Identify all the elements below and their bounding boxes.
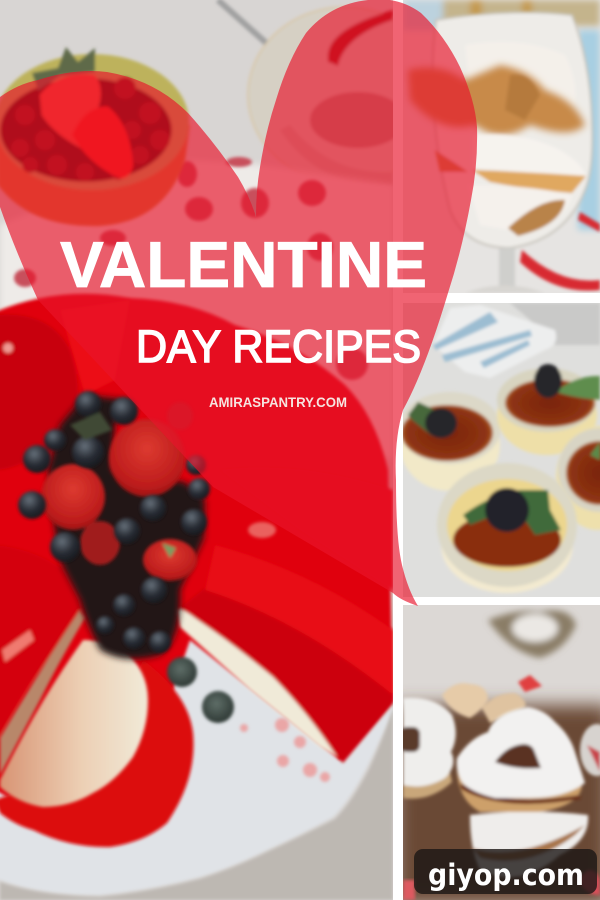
- white patterned cloth: [0, 164, 387, 310]
- golden crumbs: [408, 65, 585, 135]
- sugar background: [403, 605, 600, 900]
- left cookie: [400, 698, 456, 799]
- caramel band: [472, 170, 586, 193]
- grey table corner: [0, 708, 393, 900]
- white plate: [0, 640, 393, 895]
- watermark badge: [414, 849, 597, 894]
- title: VALENTINE: VALENTINE: [60, 228, 427, 301]
- strawberry cloth prints: [14, 157, 368, 380]
- heart overlay: [0, 0, 477, 606]
- white panna cotta half moon: [0, 640, 148, 807]
- panel: main jelly photo: [0, 0, 393, 900]
- watermark badge: giyop.com: [428, 858, 584, 892]
- sandwich layer: [457, 770, 582, 812]
- glass stem: [499, 248, 515, 293]
- panel: creme brulee photo: [399, 303, 600, 597]
- top cookie: [457, 707, 585, 798]
- tablecloth background: [0, 0, 393, 900]
- ramekin far right: [556, 426, 600, 530]
- striped cloth: [433, 303, 600, 378]
- subtitle: DAY RECIPES: DAY RECIPES: [136, 321, 421, 372]
- heart cookie stack: [457, 707, 588, 877]
- dark berry mass: [48, 395, 205, 659]
- glass dish: [246, 5, 393, 183]
- small biscuits: [442, 675, 542, 723]
- berries cluster: [18, 391, 234, 723]
- right glass item: [580, 724, 600, 776]
- blueberries: [18, 391, 234, 723]
- ramekin front: [437, 463, 577, 593]
- website credit: AMIRASPANTRY.COM: [209, 394, 347, 410]
- jelly base layer: [0, 294, 393, 824]
- silver spoon handle: [216, 0, 268, 46]
- cream top: [465, 42, 576, 110]
- cream lower: [519, 185, 554, 193]
- strawberries: [41, 402, 197, 581]
- brown table: [395, 705, 600, 900]
- panel: linzer cookies photo: [395, 605, 600, 900]
- red corner pieces: [403, 880, 415, 900]
- bowl of raspberries: [0, 47, 190, 226]
- heart stencil in sugar: [488, 611, 576, 658]
- parfait background: [403, 0, 600, 293]
- panel: parfait glass photo: [403, 0, 600, 293]
- ramekin left: [399, 392, 501, 491]
- pink crumbs on plate: [240, 718, 330, 782]
- blue wall and blinds: [403, 0, 600, 230]
- ramekin right top: [497, 364, 600, 455]
- jelly lobes right with white wedge: [177, 468, 393, 763]
- white wood planks: [403, 303, 600, 597]
- parfait glass: [408, 12, 592, 293]
- jelly lobes left: [0, 314, 114, 775]
- red jelly crescent: [0, 660, 194, 847]
- lower cookie: [470, 812, 588, 877]
- red ribbon: [520, 250, 600, 291]
- cream middle: [480, 132, 520, 142]
- sliced strawberries: [40, 74, 100, 150]
